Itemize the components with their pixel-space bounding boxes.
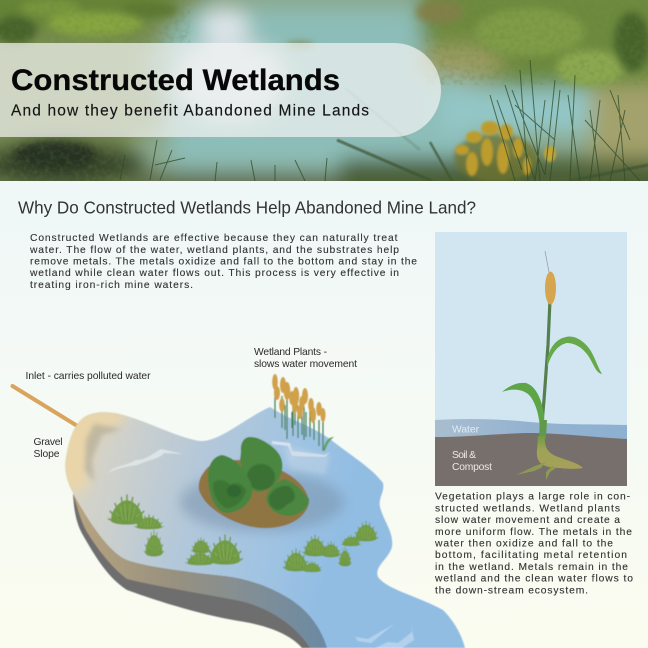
vegetation paragraph: slow water movement and create a xyxy=(435,515,620,526)
shrub left xyxy=(208,455,252,513)
intro paragraph: Constructed Wetlands are effective because they can naturally treat xyxy=(30,233,398,244)
title: Constructed Wetlands xyxy=(11,64,340,97)
gravel beach tint xyxy=(65,412,128,495)
gravel shadow xyxy=(85,424,122,482)
label: wetland plants: slows water movement xyxy=(254,359,357,370)
vegetation paragraph: water then oxidize and fall to the xyxy=(434,538,613,550)
label: inlet: Inlet - carries polluted water xyxy=(26,371,151,382)
roots xyxy=(516,462,565,480)
reeds and grasses xyxy=(120,60,640,181)
fern plumes xyxy=(336,136,648,181)
vegetation paragraph: Vegetation plays a large role in con- xyxy=(435,492,630,503)
ripple xyxy=(107,449,183,473)
intro paragraph: remove metals. The metals oxidize and fall to the bottom and stay in the xyxy=(30,256,417,268)
soil layer xyxy=(435,433,627,486)
soil label: Compost xyxy=(452,462,492,473)
vegetation paragraph: structed wetlands. Wetland plants xyxy=(435,503,620,514)
subtitle: And how they benefit Abandoned Mine Lands xyxy=(11,103,369,120)
vegetation paragraph: the down-stream ecosystem. xyxy=(435,585,588,596)
label: wetland plants xyxy=(254,347,357,370)
cattails xyxy=(272,374,334,451)
soil label xyxy=(452,450,492,473)
water surface xyxy=(65,407,465,648)
vegetation paragraph: bottom, facilitating metal retention xyxy=(435,550,627,561)
leaf left xyxy=(502,383,545,432)
base: dark rock layer xyxy=(73,494,330,648)
label: gravel slope: Slope xyxy=(34,449,60,460)
vegetation paragraph: wetland and the clean water flows to xyxy=(434,574,633,585)
label: wetland plants: Wetland Plants - xyxy=(254,347,327,358)
stem base xyxy=(539,420,547,438)
leaf right xyxy=(547,337,602,374)
title banner xyxy=(0,43,441,137)
island xyxy=(199,437,309,528)
shrub right xyxy=(266,479,309,516)
outlet ripple xyxy=(355,624,414,648)
panel water background xyxy=(435,232,627,425)
cattail head xyxy=(545,272,556,304)
reflections xyxy=(284,445,330,475)
base: soil layer xyxy=(73,493,330,648)
goldenrod flowers xyxy=(454,121,556,182)
intro paragraph: wetland while clean water flows out. This process is very effective in xyxy=(29,268,399,279)
panel: cattail cross-section xyxy=(435,232,627,486)
vegetation paragraph xyxy=(434,492,633,596)
section heading: Why Do Constructed Wetlands Help Abandoned Mine Land? xyxy=(18,198,476,218)
foliage patches xyxy=(0,0,648,169)
label: gravel slope xyxy=(34,437,62,460)
vegetation paragraph: in the wetland. Metals remain in the xyxy=(435,562,628,573)
label: gravel slope: Gravel xyxy=(34,437,62,448)
foliage texture xyxy=(68,10,190,43)
water label: Water xyxy=(452,424,480,436)
cattail plant xyxy=(502,251,602,480)
vegetation paragraph: more uniform flow. The metals in the xyxy=(435,527,632,538)
island shadow xyxy=(180,472,344,532)
wetland diagram xyxy=(60,374,465,648)
arrow: inlet pipe xyxy=(12,386,79,427)
intro paragraph xyxy=(29,233,417,291)
shrub centre xyxy=(240,437,282,492)
ripple near reeds xyxy=(272,441,330,457)
water layer xyxy=(435,419,627,440)
grass clumps xyxy=(109,495,378,572)
intro paragraph: treating iron-rich mine waters. xyxy=(30,280,193,291)
header photograph: wetland pond xyxy=(0,0,648,200)
banner pill xyxy=(0,43,441,137)
intro paragraph: water. The flow of the water, wetland plants, and the substrates help xyxy=(29,245,399,256)
root bulb xyxy=(537,436,583,469)
soil label: Soil & xyxy=(452,450,476,461)
